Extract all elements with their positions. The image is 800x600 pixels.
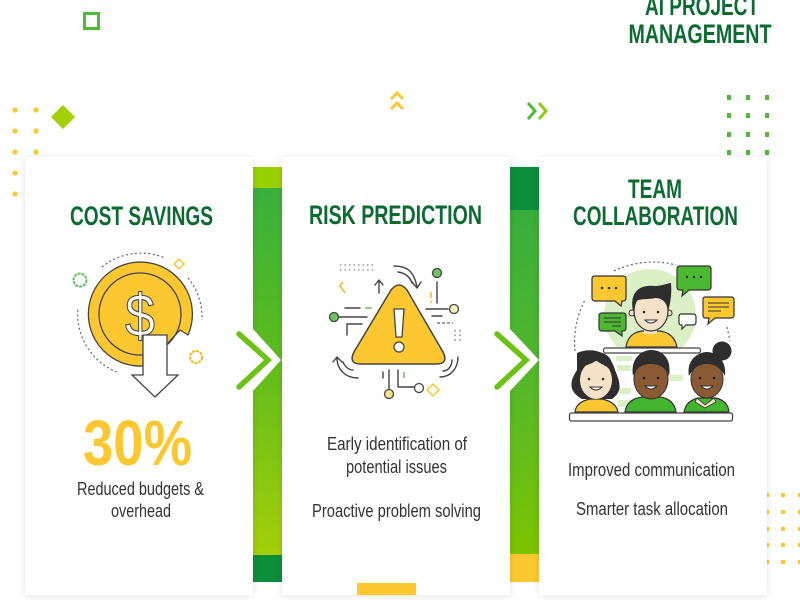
- panel: cost savings: [25, 157, 253, 595]
- speech bubbles: [592, 266, 734, 336]
- panel: risk prediction: [282, 157, 510, 595]
- person: woman: [571, 350, 620, 412]
- icon: coin with down arrow: [74, 253, 202, 397]
- accent bar: [357, 583, 416, 595]
- arrow: chevron 1: [239, 329, 281, 391]
- text: early identification: Early identification of: [327, 434, 468, 454]
- top person: [626, 283, 677, 347]
- text: early identification: potential issues: [346, 457, 447, 477]
- bottom desk: [570, 413, 732, 421]
- person: woman with bun: [684, 342, 732, 412]
- text: proactive problem solving: Proactive problem solving: [312, 501, 481, 521]
- heading: team collaboration: TEAM: [628, 174, 682, 204]
- heading: risk prediction: RISK PREDICTION: [309, 200, 482, 230]
- text: smarter task allocation: Smarter task allocation: [576, 499, 728, 519]
- person: man: [625, 350, 676, 412]
- arrow: chevron 2: [497, 329, 539, 391]
- text: reduced budgets: overhead: [111, 501, 171, 521]
- heading: team collaboration: [573, 174, 738, 231]
- icon: warning triangle: [330, 265, 460, 398]
- text: reduced budgets: [77, 479, 204, 521]
- icon: team: [570, 262, 734, 421]
- text: early identification: [327, 434, 468, 477]
- statistic: 30%: 30%: [83, 407, 192, 479]
- top desk: [604, 348, 700, 353]
- connector strip 1: [253, 167, 282, 582]
- panel: team collaboration: [539, 157, 767, 595]
- text: reduced budgets: Reduced budgets &: [77, 479, 204, 499]
- heading: cost savings: COST SAVINGS: [70, 201, 213, 231]
- text: improved communication: Improved communication: [568, 460, 735, 480]
- connector strip 2: [510, 167, 539, 582]
- title: [628, 0, 772, 49]
- icon: coin with down arrow: $: [125, 282, 155, 349]
